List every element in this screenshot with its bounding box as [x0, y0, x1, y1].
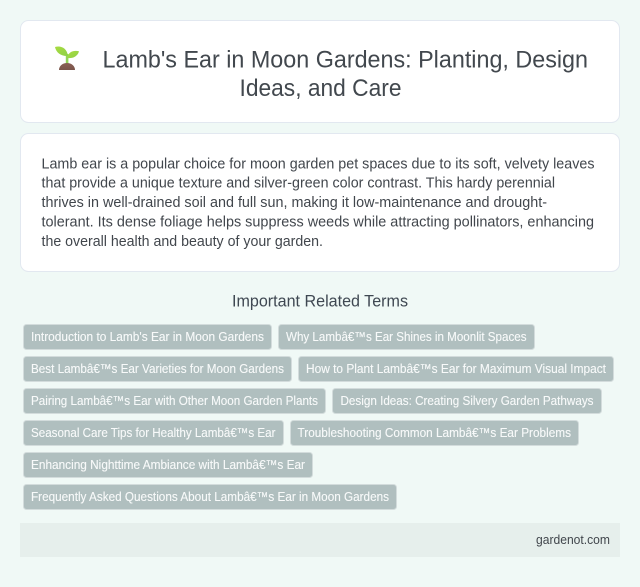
tag: How to Plant Lambâ€™s Ear for Maximum Visual Impact	[306, 361, 606, 376]
tag	[278, 324, 534, 350]
title card	[20, 20, 620, 122]
title	[102, 47, 588, 102]
footer source: gardenot.com	[536, 532, 610, 547]
tag	[24, 388, 326, 414]
tag: Introduction to Lamb's Ear in Moon Gardens	[31, 329, 264, 344]
title: Lamb's Ear in Moon Gardens: Planting, Design	[102, 47, 588, 74]
tag list	[24, 324, 614, 510]
tag: Troubleshooting Common Lambâ€™s Ear Problems	[298, 425, 571, 440]
tag: Seasonal Care Tips for Healthy Lambâ€™s Ear	[31, 425, 276, 440]
tag: Frequently Asked Questions About Lambâ€™s Ear in Moon Gardens	[31, 489, 389, 504]
tag	[332, 388, 602, 414]
intro paragraph card	[20, 134, 620, 272]
tag: Why Lambâ€™s Ear Shines in Moonlit Spaces	[286, 329, 526, 344]
intro text	[42, 156, 594, 250]
footer	[20, 523, 620, 557]
tag	[24, 484, 396, 510]
intro text: tolerant. Its dense foliage helps suppress weeds while attracting pollinators, enhancing	[42, 214, 594, 230]
intro text: thrives in well-drained soil and full sun, making it low-maintenance and drought-	[42, 195, 547, 211]
tag	[290, 420, 578, 446]
intro text: the overall health and beauty of your garden.	[42, 234, 323, 250]
tag: Best Lambâ€™s Ear Varieties for Moon Gardens	[31, 361, 284, 376]
tag	[24, 356, 292, 382]
tag: Enhancing Nighttime Ambiance with Lambâ€™s Ear	[31, 457, 306, 472]
tag	[24, 420, 284, 446]
title: Ideas, and Care	[240, 75, 402, 102]
tag	[24, 452, 312, 478]
intro text: that provide a unique texture and silver-green color contrast. This hardy perennial	[42, 176, 555, 192]
intro text: Lamb ear is a popular choice for moon garden pet spaces due to its soft, velvety leaves	[42, 156, 594, 172]
tag: Design Ideas: Creating Silvery Garden Pathways	[340, 393, 594, 408]
heading: important related terms: Important Related Terms	[232, 293, 408, 311]
tag: Pairing Lambâ€™s Ear with Other Moon Garden Plants	[31, 393, 318, 408]
tag	[298, 356, 614, 382]
tag	[24, 324, 272, 350]
icon: seedling	[55, 46, 79, 70]
